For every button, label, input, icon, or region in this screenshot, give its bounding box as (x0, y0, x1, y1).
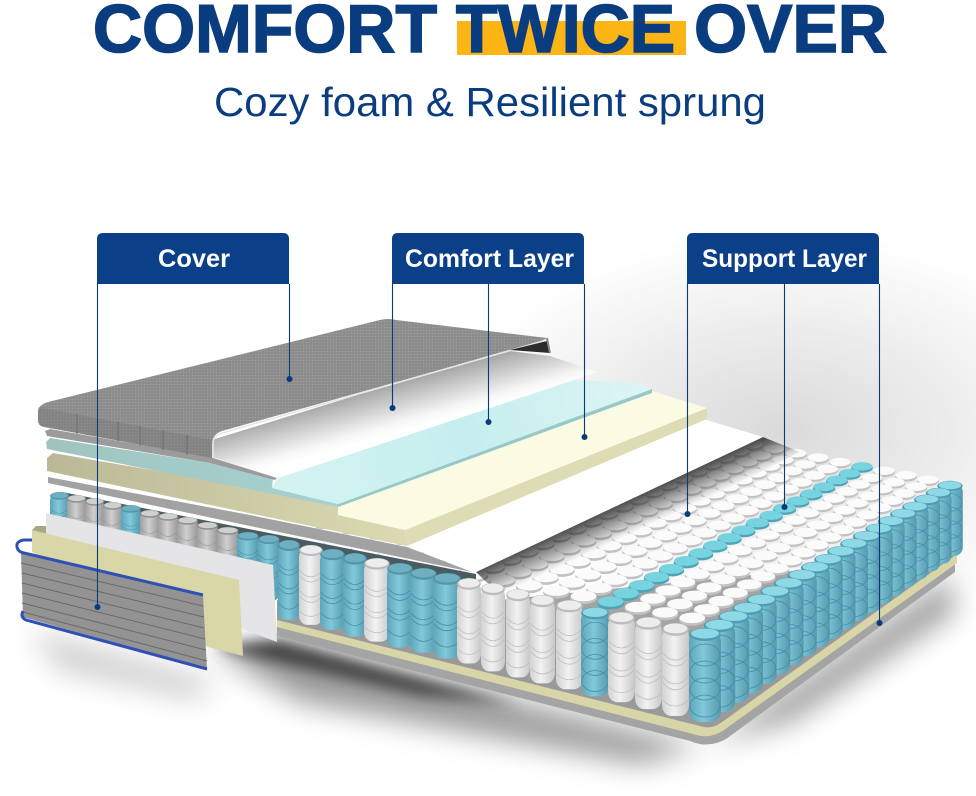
cover seams (77, 414, 187, 455)
blue binding (17, 540, 207, 669)
yellow card (32, 530, 243, 656)
dark gap behind left coils (62, 492, 476, 600)
gray block (21, 552, 207, 669)
base plate (277, 545, 957, 745)
side row coils (689, 481, 963, 722)
sheet shadow on coils (476, 437, 800, 600)
front row coils (278, 540, 689, 716)
cover top surface (38, 319, 547, 458)
label: Support Layer: Support Layer (702, 245, 867, 273)
cutaway layers (17, 513, 277, 669)
white comfort layer (212, 351, 597, 478)
lower thin gray layer (48, 477, 472, 572)
cover fold edge (213, 338, 548, 457)
mattress illustration (17, 319, 963, 764)
white card (46, 513, 277, 642)
cover front shading (38, 407, 212, 458)
coil top grid (271, 409, 939, 626)
label: Comfort Layer (390, 233, 588, 440)
blue foam layer (46, 380, 652, 507)
callouts (94, 233, 882, 626)
upper thin gray layer (45, 429, 277, 480)
label: Cover (94, 233, 292, 610)
label: Cover: Cover (158, 245, 230, 273)
yellow rim (32, 526, 46, 540)
ground shadow (30, 578, 955, 764)
title highlight bar (457, 21, 686, 55)
gray block stripes (21, 563, 207, 661)
subtitle: Cozy foam & Resilient sprung (214, 79, 766, 125)
yellow foam layer (47, 391, 707, 546)
cover lip (547, 338, 550, 353)
label: Support Layer (684, 233, 882, 626)
gray top cover (38, 319, 550, 458)
back row coils (50, 492, 280, 601)
label: Comfort Layer: Comfort Layer (405, 245, 574, 273)
title (93, 0, 887, 67)
cover inner wedge (510, 341, 550, 353)
white sheet above coils (405, 418, 763, 573)
